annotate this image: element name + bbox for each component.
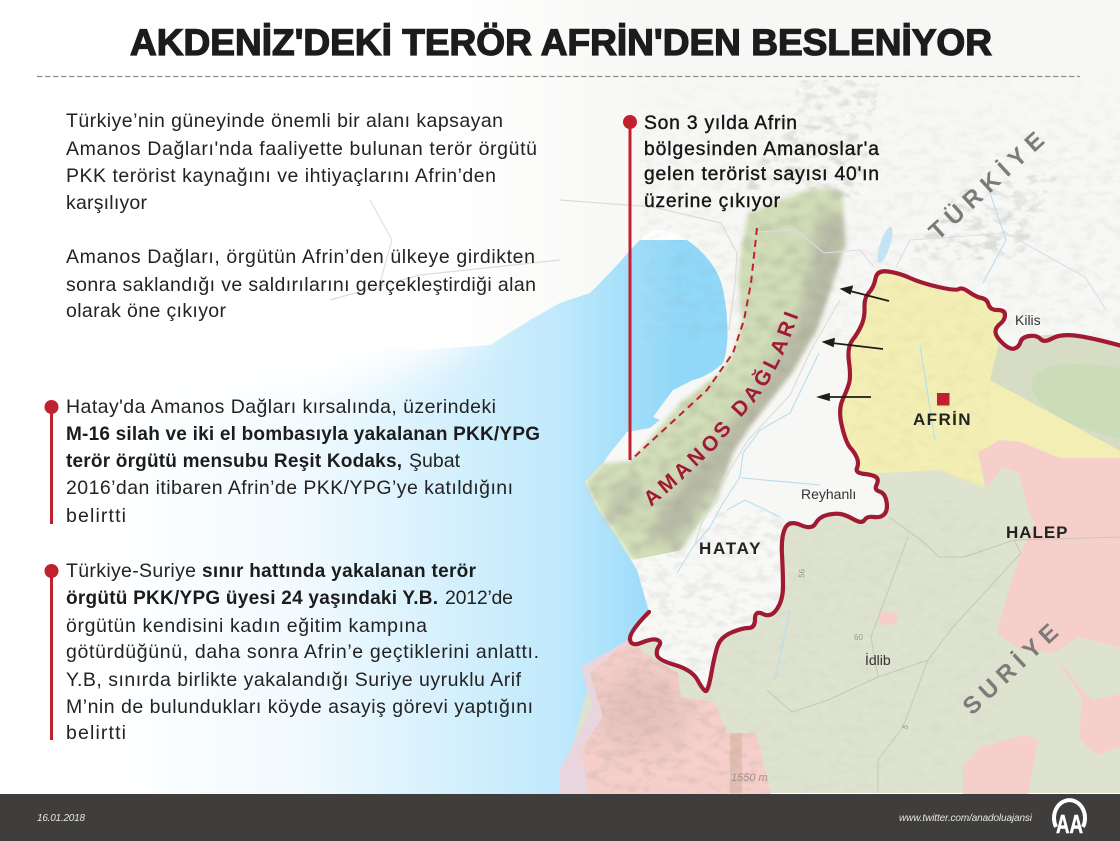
intro paragraph 1: Amanos Dağları'nda faaliyette bulunan terör örgütü — [66, 138, 537, 160]
intro paragraph 1: karşılıyor — [66, 192, 148, 214]
hillshade: Afrin — [835, 268, 1010, 493]
region: green patch in pink zone — [1053, 637, 1120, 700]
region: south pink blob — [963, 735, 1038, 795]
case 1: Reşit Kodaks — [44, 396, 540, 527]
label: İdlib: İdlib — [865, 651, 891, 668]
elevation label: 1550 m — [731, 772, 768, 784]
Amanos front dashed line — [631, 228, 757, 460]
case 1 marker line — [50, 407, 53, 524]
case 1 text: Hatay'da Amanos Dağları kırsalında, üzerindeki — [66, 396, 496, 418]
arrow 1 — [842, 286, 889, 301]
case 2 text: belirtti — [66, 722, 126, 744]
region: small pink blob near İdlib — [878, 611, 898, 625]
callout: terrorist count — [623, 113, 879, 460]
arrow 2 — [824, 339, 883, 349]
label: HALEP: HALEP — [1006, 523, 1069, 542]
hillshade: ridges above Amanos and east of it — [746, 80, 1056, 260]
case 2 marker line — [50, 571, 53, 740]
case 2 text — [66, 560, 539, 744]
sea fade under the intro text — [0, 230, 510, 430]
road numbers — [797, 568, 911, 731]
footer source: www.twitter.com/anadoluajansi — [899, 813, 1033, 824]
road numbers: 60 — [854, 633, 863, 642]
case 2 text: Y.B, sınırda birlikte yakalandığı Suriye uyruklu Arif — [66, 669, 522, 691]
region: Afrin (yellow) — [838, 270, 1120, 488]
region: Aleppo (pink) — [978, 440, 1120, 755]
case 1 text — [66, 396, 540, 527]
title: AKDENİZ'DEKİ TERÖR AFRİN'DEN BESLENİYOR — [130, 22, 992, 63]
hillshade: Syria — [670, 500, 1000, 795]
intro paragraph 1: PKK terörist kaynağını ve ihtiyaçlarını Afrin’den — [66, 165, 496, 187]
label: HATAY: HATAY — [699, 539, 762, 558]
case 1 text: belirtti — [66, 505, 126, 527]
callout marker dot — [623, 115, 637, 129]
callout text — [644, 113, 879, 212]
label: Reyhanlı: Reyhanlı — [801, 486, 856, 502]
case 1 text: terör örgütü mensubu Reşit Kodaks, — [66, 451, 402, 472]
callout text: gelen terörist sayısı 40'ın — [644, 164, 879, 185]
label: Afrin marker — [937, 393, 950, 406]
case 2 text: sınır hattında yakalanan terör — [202, 561, 477, 582]
arrows: militant movement — [819, 286, 889, 400]
case 2 marker dot — [44, 564, 58, 578]
region: grey-green zone east of Afrin — [990, 334, 1120, 455]
callout text: Son 3 yılda Afrin — [644, 113, 797, 134]
hillshade: western pink zone — [585, 640, 775, 795]
intro paragraph 2 — [66, 246, 536, 322]
region: sea buffer — [560, 640, 628, 794]
label: AMANOS DAĞLARI: AMANOS DAĞLARI — [646, 312, 798, 507]
region: green zone east of Afrin — [1031, 364, 1120, 440]
case 1 text: Şubat — [409, 450, 461, 472]
case 1 text: M-16 silah ve iki el bombasıyla yakalanan PKK/YPG — [66, 424, 540, 445]
road numbers: 5 — [900, 723, 911, 731]
case 2 text: M’nin de bulundukları köyde asayiş görevi yaptığını — [66, 696, 533, 718]
red border line — [630, 271, 1120, 691]
icon: Anadolu Agency logo: AA — [1056, 809, 1083, 839]
region: western pink zone — [581, 640, 771, 794]
roads and borders — [330, 190, 1120, 793]
callout text: bölgesinden Amanoslar'a — [644, 139, 879, 160]
case 1 text: 2016’dan itibaren Afrin’de PKK/YPG’ye katıldığını — [66, 477, 513, 499]
case 2 text: 2012’de — [445, 587, 513, 609]
case 2 text: Türkiye-Suriye — [66, 560, 196, 582]
sea — [0, 240, 760, 800]
arrow 3 — [819, 394, 871, 400]
map — [217, 0, 1120, 794]
hillshade: Hatay — [633, 510, 784, 688]
mountains: Amanos range — [584, 186, 848, 562]
road numbers: 56 — [797, 568, 807, 578]
callout marker line — [628, 122, 632, 460]
intro paragraph 2: Amanos Dağları, örgütün Afrin’den ülkeye girdikten — [66, 246, 535, 268]
intro paragraph 1: Türkiye’nin güneyinde önemli bir alanı kapsayan — [66, 110, 503, 132]
icon: Anadolu Agency logo — [1054, 800, 1085, 839]
intro paragraph 2: sonra saklandığı ve saldırılarını gerçekleştirdiği alan — [66, 274, 536, 296]
label: AFRİN: AFRİN — [913, 410, 972, 429]
hillshade: southern Türkiye — [640, 135, 1120, 340]
label: SURİYE: SURİYE — [958, 619, 1064, 720]
footer date: 16.01.2018 — [37, 813, 85, 824]
case 2 text: örgütü PKK/YPG üyesi 24 yaşındaki Y.B. — [66, 588, 438, 609]
label: TÜRKİYE: TÜRKİYE — [924, 127, 1050, 245]
case 2: Y.B. — [44, 560, 539, 744]
case 2 text: örgütün kendisini kadın eğitim kampına — [66, 615, 427, 637]
region: Syria — [560, 270, 1120, 793]
intro paragraph 2: olarak öne çıkıyor — [66, 300, 226, 322]
case 1 marker dot — [44, 400, 58, 414]
footer bar — [0, 794, 1120, 841]
callout text: üzerine çıkıyor — [644, 191, 781, 212]
case 2 text: götürdüğünü, daha sonra Afrin’e geçtiklerini anlattı. — [66, 641, 539, 663]
label: Kilis: Kilis — [1015, 312, 1041, 328]
lake — [874, 225, 896, 265]
intro paragraph 1 — [66, 110, 537, 214]
